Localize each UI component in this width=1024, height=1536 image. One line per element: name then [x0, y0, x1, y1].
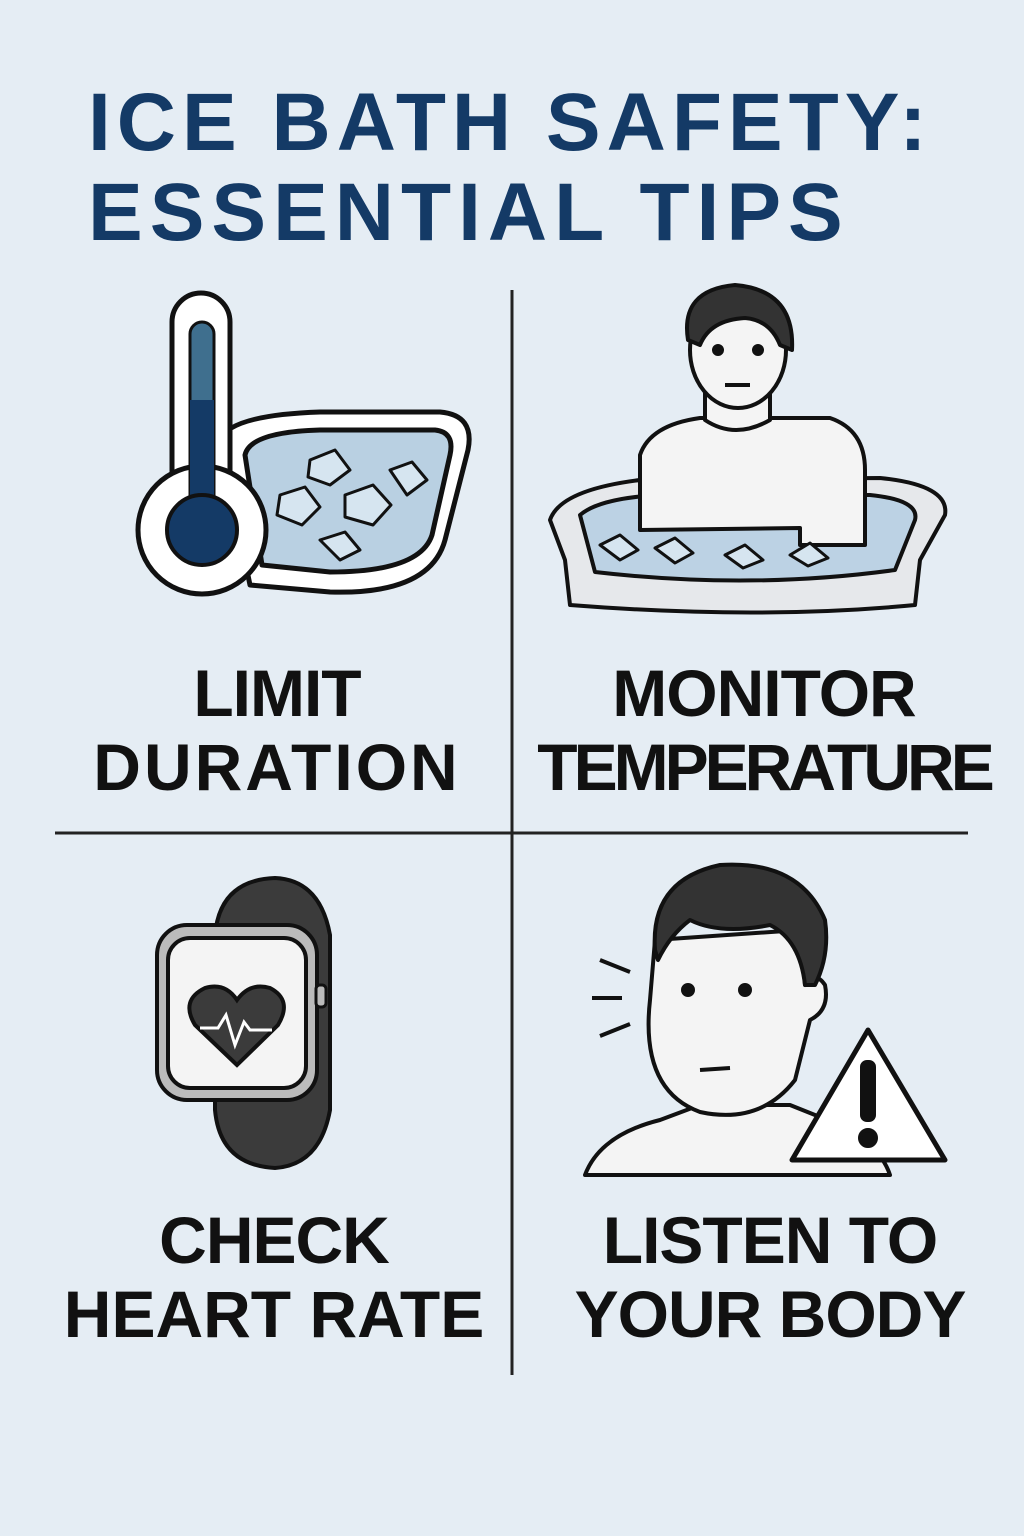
- label: listen to your body: [575, 1203, 966, 1351]
- icon: man with warning: [585, 865, 945, 1175]
- icon: thermometer with ice bath: [138, 293, 469, 594]
- title: ESSENTIAL TIPS: [88, 167, 850, 258]
- label: limit duration: LIMIT: [193, 656, 361, 730]
- label: monitor temperature: MONITOR: [612, 656, 916, 730]
- label: limit duration: [93, 656, 461, 804]
- icon: smartwatch: [157, 878, 330, 1168]
- title: [88, 77, 933, 258]
- title: ICE BATH SAFETY:: [88, 77, 933, 168]
- label: check heart rate: CHECK: [159, 1203, 389, 1277]
- label: check heart rate: [64, 1203, 484, 1351]
- label: monitor temperature: [537, 656, 992, 804]
- label: check heart rate: HEART RATE: [64, 1277, 484, 1351]
- label: listen to your body: YOUR BODY: [575, 1277, 965, 1351]
- label: limit duration: DURATION: [93, 730, 461, 804]
- icon: man in ice bath: [550, 285, 945, 612]
- label: monitor temperature: TEMPERATURE: [537, 730, 991, 804]
- label: listen to your body: LISTEN TO: [603, 1203, 937, 1277]
